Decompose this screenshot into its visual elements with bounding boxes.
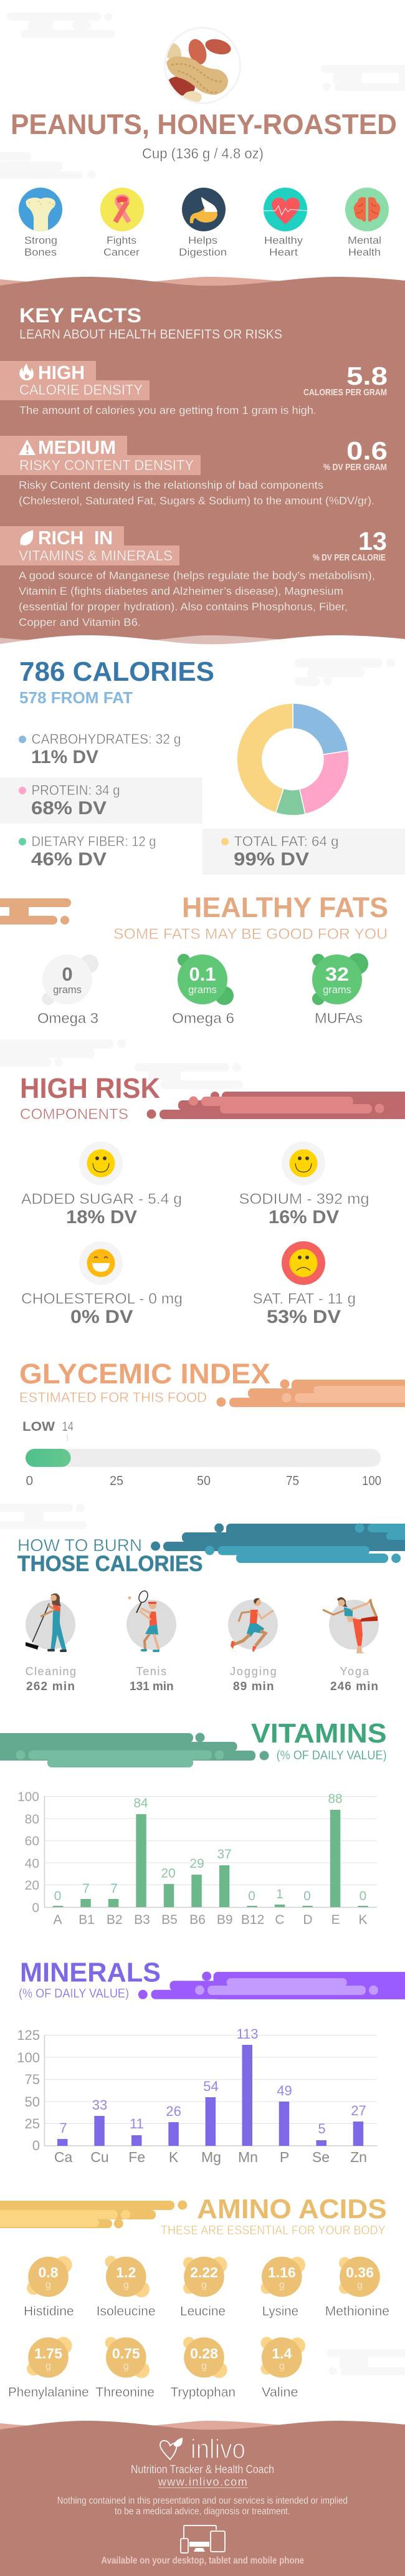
risk: added sugar: 18% DV <box>66 1207 137 1228</box>
bar chart: vitamins: B1 <box>79 1913 95 1927</box>
panel: amino acids <box>0 2194 389 2400</box>
benefit label: healthy: Healthy <box>264 235 303 246</box>
subheading: from fat: 578 FROM FAT <box>19 688 133 707</box>
metric: omega 6: grams <box>188 984 217 996</box>
risk: added sugar: ADDED SUGAR - 5.4 g <box>21 1191 182 1208</box>
bar chart: minerals: Mn <box>238 2149 258 2165</box>
bar chart: vitamins: A <box>53 1913 62 1927</box>
logo: inlivo <box>160 2434 245 2464</box>
food image: peanuts <box>164 27 241 103</box>
benefit label: heart: Heart <box>269 247 298 258</box>
label: rich in: RICH IN <box>38 527 113 549</box>
metric: mufas: 32 <box>325 963 349 985</box>
heading: those calories: THOSE CALORIES <box>17 1552 203 1576</box>
glycemic bar: 100 <box>362 1474 381 1488</box>
bar chart: vitamins: 7 <box>110 1882 118 1896</box>
benefit label: helps: Helps <box>188 235 217 246</box>
icon: stomach <box>182 188 226 231</box>
benefit label: digestion: Digestion <box>179 247 227 258</box>
risk: saturated fat <box>253 1241 356 1327</box>
bar chart: minerals: P <box>280 2149 289 2165</box>
decorative header bar <box>0 1733 269 1767</box>
bar chart: vitamins: 7 <box>82 1882 90 1896</box>
bar chart: minerals: 7 <box>59 2120 67 2136</box>
bar chart: vitamins: 20 <box>25 1878 39 1893</box>
amino: lysine <box>260 2257 305 2319</box>
donut chart <box>237 703 349 815</box>
bar chart: vitamins: B2 <box>107 1913 123 1927</box>
glycemic bar: 0 <box>26 1474 33 1488</box>
amino: valine: 1.4 <box>272 2345 292 2362</box>
benefit label: cancer: Cancer <box>103 247 140 258</box>
amino: leucine <box>180 2257 227 2319</box>
icon: leaf <box>21 530 33 545</box>
activity: yoga <box>323 1597 379 1693</box>
activity: jogging <box>228 1598 278 1693</box>
bar chart: minerals: 100 <box>17 2050 40 2065</box>
bar chart: vitamins: D <box>303 1913 313 1927</box>
heading: amino acids: AMINO ACIDS <box>197 2194 387 2224</box>
description: (essential for proper hydration). Also contains Phosphorus, Fiber, <box>19 600 348 613</box>
subheading: LEARN ABOUT HEALTH BENEFITS OR RISKS <box>19 327 282 342</box>
amino: threonine: 0.75 <box>112 2345 140 2362</box>
risk: sodium: SODIUM - 392 mg <box>239 1191 369 1208</box>
decorative header bar <box>147 1092 405 1119</box>
panel: how to burn calories <box>17 1524 405 1693</box>
glycemic bar: 75 <box>286 1474 299 1488</box>
icon: heart <box>264 188 307 231</box>
amino: isoleucine <box>97 2256 156 2319</box>
subheading: (% OF DAILY VALUE) <box>19 1986 129 2001</box>
amino: valine: g <box>279 2361 285 2372</box>
description: Vitamin E (fights diabetes and Alzheimer’s disease), Magnesium <box>19 585 343 597</box>
value: 0.6: 0.6 <box>346 436 388 465</box>
bar chart: vitamins: 37 <box>217 1847 232 1862</box>
unit: % DV PER GRAM <box>323 463 387 473</box>
panel: footer <box>0 2421 405 2576</box>
metric: omega 6: 0.1 <box>189 963 216 985</box>
bar chart: minerals: 11 <box>130 2116 144 2131</box>
bar chart: vitamins: 40 <box>25 1857 39 1871</box>
bar chart: vitamins: K <box>358 1913 368 1927</box>
bar chart: minerals: 54 <box>203 2079 219 2094</box>
fact: high calorie density <box>0 361 388 416</box>
bar chart: minerals: Fe <box>128 2149 145 2165</box>
amino: isoleucine: g <box>123 2280 129 2290</box>
amino: tryptophan: Tryptophan <box>171 2385 236 2400</box>
heading: key facts: KEY FACTS <box>19 304 141 327</box>
icon: warning triangle <box>19 440 36 455</box>
decorative header bar <box>0 898 71 925</box>
metric: omega 6 <box>172 954 234 1026</box>
bar chart: minerals: 0 <box>32 2138 40 2153</box>
description: Risky Content density is the relationship of bad components <box>19 479 323 491</box>
bar chart: vitamins: 0 <box>32 1901 39 1915</box>
glycemic bar: 25 <box>110 1474 123 1488</box>
amino: phenylalanine <box>8 2337 89 2400</box>
bar chart: minerals: 75 <box>25 2072 40 2087</box>
disclaimer: to be a medical advice, diagnosis or treatment. <box>115 2506 290 2517</box>
heading: healthy fats: HEALTHY FATS <box>182 892 388 923</box>
description: Copper and Vitamin B6. <box>19 616 141 628</box>
panel: vitamins <box>0 1718 387 1927</box>
heading: glycemic index: GLYCEMIC INDEX <box>19 1358 270 1390</box>
bar chart: vitamins: 0 <box>248 1889 255 1903</box>
bar chart: vitamins: E <box>331 1913 340 1927</box>
activity: jogging: Jogging <box>230 1665 277 1678</box>
metric: omega 3: grams <box>53 984 82 996</box>
decorative header bar <box>217 1379 405 1407</box>
risk: sodium: 16% DV <box>269 1207 339 1228</box>
bar chart: vitamins: 88 <box>328 1792 343 1806</box>
bar chart: vitamins <box>17 1790 377 1927</box>
description: A good source of Manganese (helps regulate the body’s metabolism), <box>19 569 375 582</box>
website link: www.inlivo.com <box>158 2476 247 2488</box>
bar chart: minerals: 33 <box>92 2097 107 2113</box>
activity: cleaning: Cleaning <box>26 1665 76 1678</box>
bar chart: minerals: 113 <box>236 2026 259 2042</box>
activity: cleaning <box>26 1593 76 1693</box>
risk: added sugar <box>21 1141 182 1228</box>
label: high: HIGH <box>38 362 85 383</box>
amino: threonine: g <box>123 2361 129 2372</box>
bar chart: minerals: 26 <box>166 2103 181 2119</box>
activity: tennis <box>126 1590 176 1693</box>
unit: CALORIES PER GRAM <box>303 388 387 398</box>
amino: methionine: Methionine <box>325 2304 389 2319</box>
benefit label: fights: Fights <box>107 235 136 246</box>
amino: methionine: 0.36 <box>346 2264 374 2280</box>
amino: lysine: Lysine <box>262 2304 298 2319</box>
legend: carbohydrates: CARBOHYDRATES: 32 g <box>31 731 181 747</box>
legend: total fat <box>202 829 405 875</box>
label: vitamins and minerals: VITAMINS & MINERALS <box>19 547 173 564</box>
amino: methionine: g <box>357 2280 363 2290</box>
bar chart: minerals: Cu <box>90 2149 109 2165</box>
bar chart: vitamins: 1 <box>276 1887 284 1901</box>
amino: tryptophan: g <box>201 2361 207 2372</box>
fact: medium risky content density <box>0 436 388 507</box>
amino: phenylalanine: 1.75 <box>34 2345 62 2362</box>
metric: mufas <box>312 953 368 1026</box>
legend: total fat: TOTAL FAT: 64 g <box>234 834 339 849</box>
decorative header bar <box>0 2201 187 2228</box>
amino: lysine: 1.16 <box>268 2264 296 2280</box>
serving size: Cup (136 g / 4.8 oz) <box>142 145 264 161</box>
legend: protein <box>0 777 202 824</box>
decorative header bar <box>151 1524 405 1563</box>
amino: isoleucine: Isoleucine <box>97 2304 156 2319</box>
panel: minerals <box>17 1958 405 2165</box>
activity: jogging: 89 min <box>233 1680 274 1693</box>
risk: cholesterol <box>21 1241 183 1327</box>
amino: threonine: Threonine <box>95 2385 155 2400</box>
disclaimer <box>57 2496 348 2517</box>
heading: minerals: MINERALS <box>20 1958 161 1988</box>
activity: tennis: Tenis <box>136 1665 166 1678</box>
bar chart: minerals: 49 <box>277 2083 292 2098</box>
metric: mufas: MUFAs <box>315 1010 363 1026</box>
glycemic bar <box>26 1449 381 1488</box>
bar chart: minerals: 50 <box>25 2094 40 2110</box>
bar chart: minerals: Ca <box>54 2149 73 2165</box>
amino: valine: Valine <box>262 2385 298 2400</box>
bar chart: minerals: Zn <box>350 2149 367 2165</box>
bar chart: vitamins: 20 <box>161 1867 176 1880</box>
subheading: components: COMPONENTS <box>20 1106 128 1123</box>
heading: vitamins: VITAMINS <box>251 1718 387 1749</box>
benefit label: health: Health <box>348 247 381 258</box>
icon: strong bones <box>19 188 62 231</box>
metric: omega 6: Omega 6 <box>172 1010 234 1026</box>
subheading: (% OF DAILY VALUE) <box>277 1748 387 1762</box>
amino: lysine: g <box>279 2280 285 2290</box>
value: 5.8: 5.8 <box>346 362 388 390</box>
activity: tennis: 131 min <box>130 1680 174 1693</box>
decorative header bar <box>138 1971 405 1999</box>
description: The amount of calories you are getting from 1 gram is high. <box>19 404 317 416</box>
value: 13: 13 <box>358 527 387 555</box>
availability note: Available on your desktop, tablet and mobile phone <box>101 2555 304 2566</box>
icon: cancer ribbon <box>100 188 144 231</box>
metric: omega 3 <box>37 954 98 1026</box>
label: calorie density: CALORIE DENSITY <box>19 382 143 398</box>
amino: leucine: 2.22 <box>190 2264 218 2280</box>
risk: saturated fat: 53% DV <box>267 1307 341 1327</box>
bar chart: vitamins: B12 <box>241 1913 264 1927</box>
legend: total fat: 99% DV <box>234 849 309 870</box>
bar chart: minerals: 125 <box>17 2027 40 2043</box>
bar chart: vitamins: 0 <box>54 1889 61 1903</box>
bar chart: vitamins: 0 <box>303 1889 311 1903</box>
fact: rich in vitamins and minerals <box>0 526 387 628</box>
bar chart: minerals: 27 <box>351 2103 366 2118</box>
tagline: Nutrition Tracker & Health Coach <box>131 2463 274 2476</box>
panel: calories <box>0 656 405 875</box>
bar chart: vitamins: 60 <box>25 1834 39 1848</box>
activity: yoga: Yoga <box>340 1665 369 1678</box>
amino: phenylalanine: Phenylalanine <box>8 2385 89 2400</box>
label: medium: MEDIUM <box>38 436 116 458</box>
bar chart: minerals <box>17 2026 377 2165</box>
amino: methionine <box>325 2257 389 2319</box>
amino: valine <box>260 2337 305 2400</box>
legend: dietary fiber: DIETARY FIBER: 12 g <box>31 834 156 849</box>
bar chart: minerals: Se <box>312 2149 330 2165</box>
icon: flame <box>19 363 34 380</box>
legend: carbohydrates <box>19 731 181 767</box>
glycemic rating <box>22 1420 74 1441</box>
metric: mufas: grams <box>323 984 351 996</box>
amino: leucine: g <box>201 2280 207 2290</box>
bar chart: vitamins: B9 <box>217 1913 233 1927</box>
title: PEANUTS, HONEY-ROASTED <box>11 108 397 140</box>
bar chart: vitamins: 100 <box>17 1790 39 1804</box>
bar chart: minerals: 5 <box>318 2121 326 2136</box>
risk: cholesterol: CHOLESTEROL - 0 mg <box>21 1290 183 1307</box>
amino: histidine: 0.8 <box>39 2264 59 2280</box>
label: risky content density: RISKY CONTENT DENSITY <box>19 457 194 473</box>
panel: key facts <box>0 277 405 651</box>
health benefits row <box>19 188 389 258</box>
metric: omega 3: Omega 3 <box>37 1010 98 1026</box>
subheading: SOME FATS MAY BE GOOD FOR YOU <box>113 926 388 943</box>
bar chart: vitamins: 0 <box>360 1889 366 1903</box>
logo: inlivo: inlivo <box>191 2434 245 2464</box>
panel: glycemic index <box>19 1358 405 1488</box>
activity: yoga: 246 min <box>330 1680 378 1693</box>
glycemic bar: 50 <box>197 1474 211 1488</box>
benefit label: bones: Bones <box>24 247 57 258</box>
disclaimer: Nothing contained in this presentation and our services is intended or implied <box>57 2496 348 2506</box>
benefit label: strong bones: Strong <box>24 235 57 246</box>
legend: protein: 68% DV <box>31 798 107 819</box>
legend: dietary fiber <box>19 834 156 870</box>
panel: healthy fats <box>0 892 388 1026</box>
bar chart: vitamins: 29 <box>189 1857 204 1871</box>
bar chart: vitamins: B3 <box>134 1913 150 1927</box>
bar chart: minerals: Mg <box>201 2149 221 2165</box>
heading: 786 calories: 786 CALORIES <box>19 656 214 687</box>
subheading: ESTIMATED FOR THIS FOOD <box>19 1390 207 1405</box>
amino: tryptophan <box>171 2337 236 2400</box>
bar chart: vitamins: 84 <box>133 1796 148 1810</box>
bar chart: vitamins: B5 <box>161 1913 178 1927</box>
bar chart: minerals: K <box>169 2149 179 2165</box>
description: (Cholesterol, Saturated Fat, Sugars & Sodium) to the amount (%DV/gr). <box>19 494 374 507</box>
glycemic rating: 14 <box>62 1420 74 1434</box>
legend: dietary fiber: 46% DV <box>31 849 107 870</box>
amino: phenylalanine: g <box>45 2361 51 2372</box>
panel: high risk <box>20 1072 405 1327</box>
amino: histidine: g <box>45 2280 51 2290</box>
unit: % DV PER CALORIE <box>313 553 386 563</box>
bar chart: minerals: 25 <box>25 2116 40 2131</box>
icon: brain <box>345 188 389 231</box>
amino: threonine <box>95 2337 155 2400</box>
amino: histidine: Histidine <box>24 2304 74 2319</box>
description <box>19 479 374 507</box>
legend: carbohydrates: 11% DV <box>31 747 98 767</box>
description <box>19 569 375 628</box>
activity: cleaning: 262 min <box>26 1680 75 1693</box>
glycemic rating: LOW <box>22 1420 55 1434</box>
risk: cholesterol: 0% DV <box>70 1307 133 1327</box>
bar chart: vitamins: 80 <box>25 1812 39 1827</box>
amino: isoleucine: 1.2 <box>116 2264 136 2280</box>
amino: leucine: Leucine <box>180 2304 226 2319</box>
amino: histidine <box>24 2256 74 2319</box>
amino: tryptophan: 0.28 <box>190 2345 218 2362</box>
metric: omega 3: 0 <box>62 963 73 985</box>
bar chart: vitamins: C <box>275 1913 285 1927</box>
benefit label: mental: Mental <box>348 235 381 246</box>
risk: saturated fat: SAT. FAT - 11 g <box>253 1290 356 1307</box>
heading: how to burn: HOW TO BURN <box>17 1536 142 1555</box>
icon: devices <box>181 2526 225 2553</box>
heading: high risk: HIGH RISK <box>20 1072 160 1104</box>
risk: sodium <box>239 1141 369 1228</box>
legend: protein: PROTEIN: 34 g <box>31 782 120 798</box>
bar chart: vitamins: B6 <box>189 1913 206 1927</box>
